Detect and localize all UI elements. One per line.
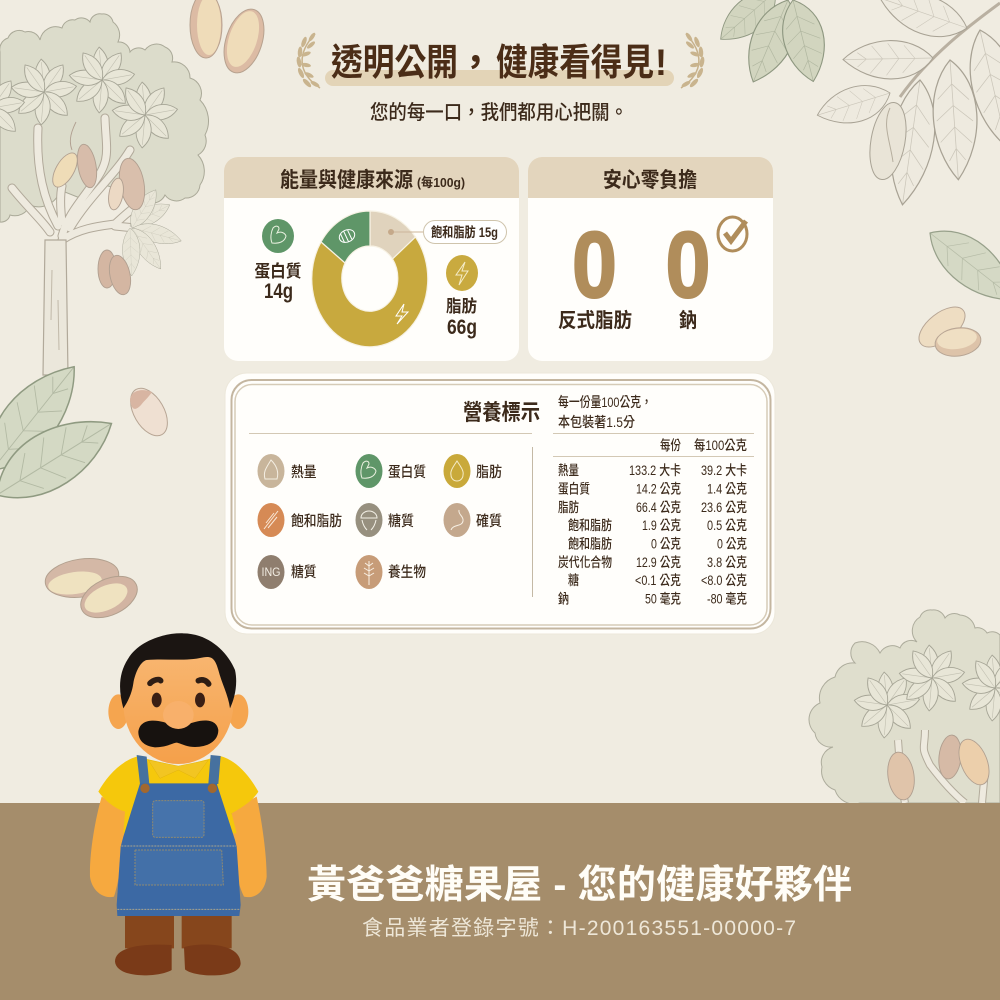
table column per serving: 1.9 公克 xyxy=(642,518,681,533)
table column per 100g: 3.8 公克 xyxy=(707,555,747,570)
serving note: 本包裝著1.5分 xyxy=(558,414,635,430)
table column per serving xyxy=(629,463,681,606)
title: 健康看得見 xyxy=(496,42,654,83)
eyebrows xyxy=(150,680,209,684)
zero trans fat: 0 xyxy=(572,212,617,317)
legend: ingredients: 糖質 xyxy=(291,564,316,581)
upper pocket xyxy=(153,801,204,837)
legend: ingredients xyxy=(258,555,316,589)
table labels: 鈉 xyxy=(558,592,569,606)
table column per 100g: <8.0 公克 xyxy=(701,573,747,588)
panel: energy sources xyxy=(224,157,519,361)
table header: 每100公克 xyxy=(694,438,747,453)
illustration: top-right branch with leaves xyxy=(812,0,1000,208)
legend: fat xyxy=(444,454,502,488)
nose xyxy=(163,701,194,729)
panel: nutrition facts xyxy=(225,373,775,634)
footer text xyxy=(307,864,852,940)
legend: ingredients: ING xyxy=(262,567,281,579)
title xyxy=(331,42,667,83)
table labels: 蛋白質 xyxy=(558,480,590,496)
shirt xyxy=(98,756,258,833)
serving note: 每一份量100公克， xyxy=(558,394,652,410)
title highlight band xyxy=(325,70,674,86)
panel heading: 安心零負擔 xyxy=(603,168,697,192)
table column per 100g: 1.4 公克 xyxy=(707,482,747,496)
apron xyxy=(117,783,241,916)
laurel right xyxy=(681,32,705,88)
table column per serving: 66.4 公克 xyxy=(636,500,681,515)
character: mascot xyxy=(90,633,267,975)
shoes xyxy=(115,944,241,975)
brand line: 黃爸爸糖果屋 - 您的健康好夥伴 xyxy=(307,864,852,907)
mustache xyxy=(138,721,218,747)
illustration: right nuts xyxy=(912,299,983,359)
illustration: right green leaf xyxy=(917,215,1000,316)
illustration: single nut xyxy=(123,382,175,442)
legend: sugars: 糖質 xyxy=(388,513,414,530)
collar xyxy=(148,760,208,778)
table column per 100g xyxy=(701,463,747,606)
arms xyxy=(90,797,267,897)
illustration: lower-left nuts xyxy=(43,554,144,626)
table column per 100g: 39.2 大卡 xyxy=(701,463,747,478)
table column per serving: 14.2 公克 xyxy=(636,482,681,496)
illustration: left green leaves xyxy=(0,350,125,517)
legend: minerals: 確質 xyxy=(476,513,502,530)
zero sodium: 0 xyxy=(666,212,710,317)
legend: protein: 蛋白質 xyxy=(388,464,426,481)
table column per 100g: 0 公克 xyxy=(717,536,747,552)
table header: 每份 xyxy=(660,438,681,453)
sodium label: 鈉 xyxy=(679,309,697,332)
title: 透明公開 xyxy=(331,42,458,83)
table column per serving: 0 公克 xyxy=(651,536,681,552)
waist seam xyxy=(117,846,240,909)
per 100g note: (每100g) xyxy=(417,175,465,190)
protein icon xyxy=(262,219,294,253)
title block xyxy=(296,32,705,124)
table labels: 炭代化合物 xyxy=(558,555,612,570)
table labels: 脂肪 xyxy=(558,500,579,515)
head xyxy=(123,643,233,764)
table labels: 飽和脂肪 xyxy=(568,517,612,533)
legend: fat: 脂肪 xyxy=(476,464,502,481)
illustration: bottom-right tree xyxy=(809,610,1000,804)
leader line xyxy=(391,231,423,233)
table column per 100g: -80 毫克 xyxy=(707,590,747,606)
legend: calories: 熱量 xyxy=(291,464,316,481)
trans fat label: 反式脂肪 xyxy=(558,308,632,332)
panel header xyxy=(528,157,773,198)
legend: nutrients xyxy=(356,555,426,589)
nutrition table xyxy=(558,438,747,606)
icon: nut in green slice xyxy=(337,227,357,245)
fat value: 66g xyxy=(447,316,477,339)
table column per 100g: 0.5 公克 xyxy=(707,518,747,533)
table column per serving: <0.1 公克 xyxy=(635,573,681,588)
table column per serving: 50 毫克 xyxy=(645,590,681,606)
eyes xyxy=(152,693,205,707)
icon: check mark xyxy=(718,217,747,251)
legend: protein xyxy=(356,454,426,488)
registration number: 食品業者登錄字號：H-200163551-00000-7 xyxy=(362,917,796,940)
fat icon xyxy=(446,255,478,291)
table header xyxy=(660,438,747,453)
panel header xyxy=(224,157,519,198)
table labels: 糖 xyxy=(568,573,579,588)
illustration: top-right green leaves xyxy=(710,0,834,90)
title: ! xyxy=(655,42,667,83)
legend: calories xyxy=(258,454,316,488)
legend: nutrients: 養生物 xyxy=(388,563,426,581)
hair xyxy=(120,633,236,708)
protein value: 14g xyxy=(264,280,293,303)
nutrition heading: 營養標示 xyxy=(463,400,540,425)
callout: saturated fat xyxy=(424,220,506,244)
illustration: top-left tree xyxy=(0,14,209,375)
lower pocket xyxy=(135,850,223,885)
title: ， xyxy=(457,42,494,83)
ears xyxy=(108,694,248,729)
nutrient legend xyxy=(258,454,502,589)
straps xyxy=(137,755,221,784)
callout: saturated fat: 飽和脂肪 15g xyxy=(431,224,498,240)
laurel left xyxy=(296,32,320,88)
subtitle: 您的每一口，我們都用心把關。 xyxy=(370,101,628,124)
fat label: 脂肪 xyxy=(446,297,477,316)
table labels: 熱量 xyxy=(558,463,579,478)
buttons xyxy=(140,784,217,793)
donut chart xyxy=(312,211,428,347)
table labels xyxy=(558,463,612,606)
footer band xyxy=(0,803,1000,1000)
table column per serving: 12.9 公克 xyxy=(636,555,681,570)
legend: minerals xyxy=(444,503,502,537)
illustration: falling nuts top xyxy=(190,0,271,78)
legend: sugars xyxy=(356,503,414,537)
protein label: 蛋白質 xyxy=(254,262,302,281)
table column per serving: 133.2 大卡 xyxy=(629,463,681,478)
serving note xyxy=(558,394,652,430)
table column per 100g: 23.6 公克 xyxy=(701,500,747,515)
panel: zero burden xyxy=(528,157,773,361)
legend: saturated fat xyxy=(258,503,342,537)
panel heading: 能量與健康來源 xyxy=(280,168,413,192)
table labels: 飽和脂肪 xyxy=(568,536,612,552)
legs xyxy=(125,907,232,948)
icon: lightning in gold slice xyxy=(396,304,408,324)
legend: saturated fat: 飽和脂肪 xyxy=(291,512,342,530)
